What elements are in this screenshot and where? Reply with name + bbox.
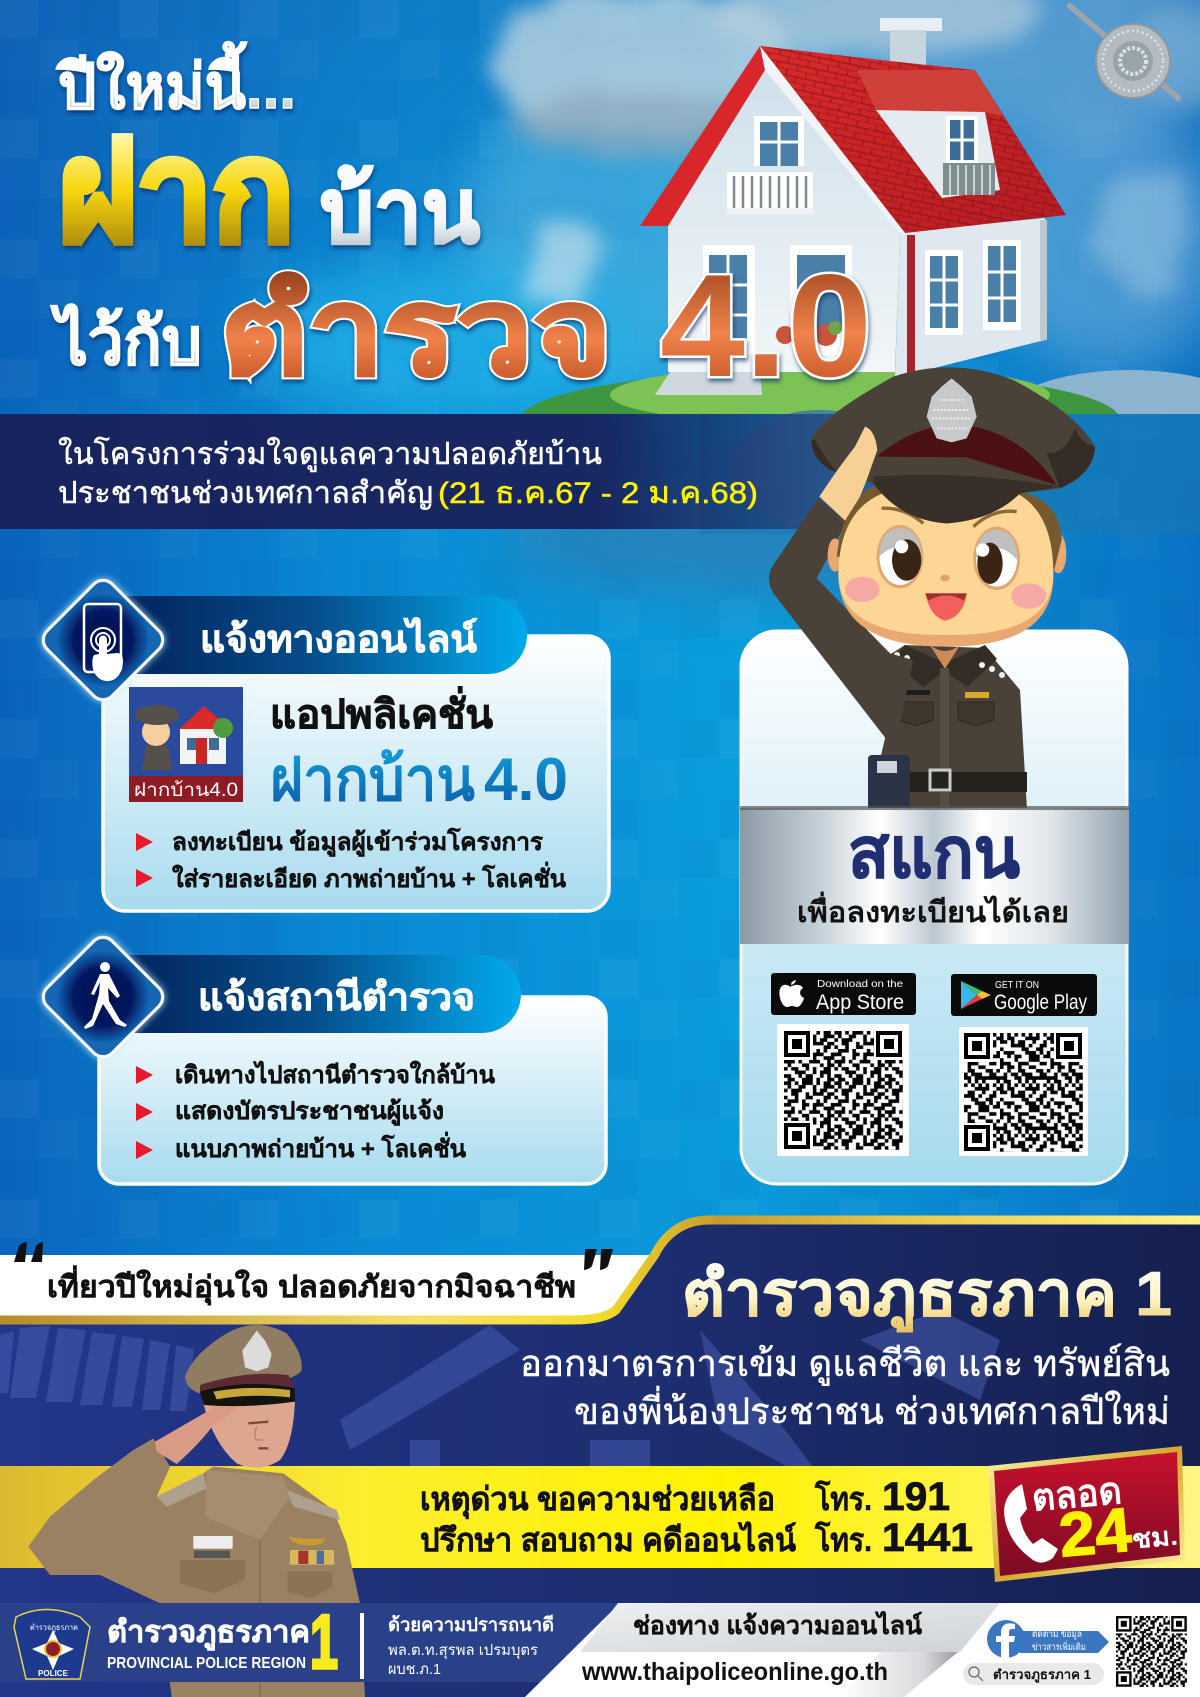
background clouds [250, 0, 1200, 600]
quote banner: เที่ยวปีใหม่อุ่นใจ ปลอดภัยจากมิจฉาชีพ [47, 1265, 576, 1306]
title: 4.0 [660, 244, 872, 407]
header pill: online [110, 596, 527, 674]
header pill: station [110, 955, 521, 1033]
title: บ้าน [320, 162, 480, 262]
title: ฝาก [58, 113, 294, 270]
illustration: house on grass [522, 18, 1200, 414]
footer: online channels [525, 1603, 1200, 1697]
icon: app logo [129, 687, 243, 802]
eyes [877, 525, 923, 588]
bullet list: station: เดินทางไปสถานีตำรวจใกล้บ้าน [175, 1060, 496, 1089]
signature: ผบช.ภ.1 [388, 1661, 441, 1678]
badge: 24 hours: ชม. [1131, 1520, 1179, 1554]
bullet list: online: ลงทะเบียน ข้อมูลผู้เข้าร่วมโครงการ [172, 827, 543, 857]
icon: police emblem seal top right [1070, 6, 1178, 98]
silver scan band [740, 806, 1129, 944]
hat [812, 367, 1095, 523]
bullet list: online [136, 827, 567, 893]
bullet list: station: แสดงบัตรประชาชนผู้แจ้ง [175, 1098, 444, 1126]
silver scan band: เพื่อลงทะเบียนได้เลย [797, 891, 1069, 929]
panel: online reporting [38, 575, 609, 911]
scan title: สแกน [848, 814, 1020, 892]
icon: facebook follow arrow: ข่าวสารเพิ่มเติม [1032, 1640, 1086, 1653]
body [850, 645, 1027, 810]
face [203, 1400, 295, 1468]
title [50, 41, 872, 407]
region name: ตำรวจภูธรภาค [107, 1616, 310, 1651]
hotline text: 1441 [882, 1516, 973, 1560]
panel: scan QR [741, 631, 1127, 1184]
hotline text [420, 1475, 973, 1560]
hotline text: เหตุด่วน ขอความช่วยเหลือ [420, 1481, 775, 1520]
title: ไว้กับ [50, 303, 202, 378]
logo: police shield: POLICE [38, 1669, 69, 1678]
icon: facebook follow arrow [987, 1620, 1109, 1658]
title: ตำรวจ [220, 264, 612, 400]
badge: 24 hours: 24 [1056, 1496, 1135, 1571]
badge: Google Play: Google Play [994, 991, 1087, 1014]
QR code: App Store [777, 1024, 909, 1156]
hand [155, 1397, 242, 1464]
hair and ears [828, 538, 842, 572]
icon: walking person in diamond [38, 932, 168, 1062]
region headline: ตำรวจภูธรภาค 1 [682, 1260, 1172, 1332]
signature: พล.ต.ท.สุรพล เปรมบุตร [388, 1642, 538, 1660]
bullet list: station [136, 1060, 496, 1163]
bullet list: online: ใส่รายละเอียด ภาพถ่ายบ้าน + โลเคชั่น [172, 861, 567, 893]
gold trim line [0, 1220, 1200, 1320]
panel: police station reporting [38, 932, 606, 1184]
badge: 24 hours [988, 1446, 1185, 1582]
badge: Google Play: GET IT ON [995, 980, 1039, 991]
bottom navy section [0, 1217, 1200, 1697]
hotline text: โทร. [814, 1521, 872, 1558]
region name: PROVINCIAL POLICE REGION [107, 1655, 306, 1672]
band backdrop behind cartoon [700, 410, 1200, 534]
website: www.thaipoliceonline.go.th [581, 1658, 888, 1686]
header pill: online: แจ้งทางออนไลน์ [200, 617, 477, 661]
subtitle text: ในโครงการร่วมใจดูแลความปลอดภัยบ้าน [58, 436, 602, 472]
navy subtitle band [0, 414, 1000, 529]
torso and arm [28, 1438, 365, 1697]
icon: app logo: ฝากบ้าน4.0 [134, 780, 238, 801]
hat badge [927, 378, 977, 442]
logo: police shield: ตำรวจภูธรภาค [30, 1623, 78, 1633]
region headline: ออกมาตรการเข้ม ดูแลชีวิต และ ทรัพย์สิน [520, 1343, 1170, 1386]
icon: phone handset [1004, 1484, 1058, 1563]
hand [819, 427, 877, 521]
icon: phone touch in diamond [38, 575, 168, 705]
app name: ฝากบ้าน [270, 746, 475, 813]
quote marks [14, 1242, 613, 1270]
title line: new year: ปีใหม่นี้... [55, 41, 296, 122]
cap [185, 1325, 302, 1393]
quote banner [0, 1242, 660, 1320]
channel heading: ช่องทาง แจ้งความออนไลน์ [633, 1610, 922, 1640]
search pill: ตำรวจภูธรภาค 1 [993, 1667, 1091, 1683]
subtitle text: (21 ธ.ค.67 - 2 ม.ค.68) [438, 477, 758, 510]
footer: region identity bar [0, 1600, 620, 1685]
logo: police shield [14, 1610, 90, 1679]
face [838, 490, 1053, 647]
hotline text: โทร. [814, 1480, 872, 1517]
photo: saluting commander [28, 1325, 365, 1697]
region name [107, 1600, 338, 1685]
raised arm [769, 498, 913, 740]
yellow hotline band [0, 1466, 1200, 1568]
QR code: footer [1115, 1615, 1188, 1688]
bullet list: station: แนบภาพถ่ายบ้าน + โลเคชั่น [175, 1131, 467, 1163]
search pill [963, 1663, 1104, 1685]
subtitle text [58, 436, 758, 510]
badge: 24 hours: ตลอด [1030, 1470, 1123, 1520]
region name: 1 [310, 1600, 338, 1685]
app name: แอปพลิเคชั่น [270, 686, 493, 737]
hotline text: ปรึกษา สอบถาม คดีออนไลน์ [420, 1521, 796, 1558]
badge: App Store [771, 973, 916, 1015]
app name: 4.0 [484, 746, 568, 813]
decorations [193, 1536, 233, 1549]
badge: App Store: Download on the [817, 978, 903, 990]
header pill: station: แจ้งสถานีตำรวจ [198, 977, 475, 1019]
badge: Google Play [951, 974, 1097, 1016]
signature: ด้วยความปรารถนาดี [388, 1614, 554, 1636]
region headline [520, 1260, 1172, 1432]
QR code: Google Play [959, 1027, 1088, 1156]
badge: App Store: App Store [816, 991, 904, 1014]
subtitle text: ประชาชนช่วงเทศกาลสำคัญ [58, 477, 433, 510]
hotline text: 191 [882, 1475, 950, 1519]
title: ตำรวจ [220, 264, 612, 400]
illustration: saluting cartoon police officer [769, 367, 1095, 810]
icon: facebook follow arrow: ติดตาม ข้อมูล [1032, 1629, 1082, 1640]
mouth, nose and blush [940, 575, 950, 581]
app name [270, 686, 568, 813]
region headline: ของพี่น้องประชาชน ช่วงเทศกาลปีใหม่ [574, 1385, 1170, 1432]
signature [388, 1614, 554, 1678]
